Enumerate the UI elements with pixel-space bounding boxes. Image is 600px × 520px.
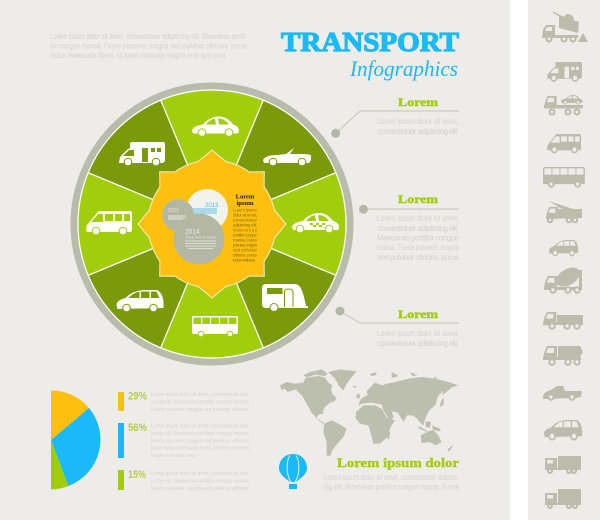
icon: convertible	[263, 148, 311, 166]
circle 2011: 2011	[168, 208, 179, 214]
callout 1: Lorem	[398, 95, 438, 109]
timeline circles	[162, 189, 228, 264]
centre text: posuere, magna	[233, 242, 258, 248]
callout 3: Lorem	[398, 307, 438, 321]
centre text: porttitor congue	[233, 232, 258, 238]
centre text: dolor sit amet,	[233, 212, 257, 218]
callout 2: massa. Fusce posuere, magna	[377, 243, 459, 252]
legend 29%	[118, 390, 250, 413]
icon: box truck	[545, 456, 581, 473]
title: Infographics	[349, 56, 458, 81]
centre text: lectus malesua	[233, 258, 256, 262]
title: TRANSPORT	[281, 27, 459, 57]
callout 3: Lorem ipsum dolor sit amet,	[377, 329, 459, 338]
centre text: sed pulvinar	[233, 248, 258, 252]
centre text: consectetuer	[233, 218, 258, 222]
centre text: massa. Fusce	[233, 238, 258, 242]
world map	[280, 369, 458, 456]
circle 2014	[174, 214, 224, 264]
icon: crane truck	[546, 201, 582, 222]
title	[281, 27, 459, 81]
centre text: Lorem ipsum	[233, 208, 257, 212]
callout 2: Lorem	[398, 192, 438, 206]
legend 56%	[118, 422, 250, 459]
callout 2: sed pulvinar ultricies, purus	[377, 253, 459, 262]
legend 15%	[118, 469, 250, 492]
centre text: ipsum	[237, 200, 254, 207]
legend 56%: iscing elit. Maecenas porttitor congue massa.	[151, 431, 250, 437]
legend 56%: magna eros quis urna.	[151, 453, 196, 459]
icon: flatbed truck	[543, 312, 583, 329]
callout 2: Lorem ipsum dolor sit amet,	[377, 214, 459, 223]
legend 15%: 15%	[128, 469, 146, 481]
icon: van	[547, 134, 581, 153]
icon: station wagon	[544, 420, 582, 440]
wheel chart	[74, 86, 350, 362]
icon: van	[86, 211, 132, 235]
intro text: Lorem ipsum dolor sit amet, consectetuer adipiscing elit. Maecenas portti-	[50, 32, 247, 41]
map caption	[324, 455, 459, 492]
legend 56%: purus lectus malesuada libero, sit amet commodo	[151, 446, 250, 452]
wedges	[78, 90, 346, 358]
legend 29%: 29%	[128, 390, 147, 402]
centre text: Lorem	[236, 194, 255, 200]
centre text: adipiscing elit.	[233, 222, 257, 228]
callout 2: consectetuer adipiscing elit.	[377, 224, 459, 233]
map caption: Lorem ipsum dolor sit amet, consectetuer adipisc-	[324, 473, 459, 482]
legend 15%: Lorem ipsum dolor sit amet, consectetuer adip-	[151, 471, 250, 477]
map caption: Lorem ipsum dolor	[337, 455, 459, 470]
legend 29%: Lorem ipsum dolor sit amet, consectetuer adip-	[151, 392, 250, 398]
legend 56%: Lorem ipsum dolor sit amet, consectetuer adip-	[151, 424, 250, 430]
legend 56%: 56%	[128, 422, 147, 434]
icon: pickup	[543, 386, 582, 400]
callout 1: consectetuer adipiscing elit.	[377, 127, 459, 136]
centre text: ultricies, purus	[233, 252, 258, 258]
icon: tow truck	[544, 95, 583, 114]
icon: minivan	[116, 290, 164, 312]
centre text: Maecenas	[233, 228, 258, 232]
callout 1	[331, 95, 459, 138]
map caption: ing elit. Maecenas porttitor congue massa. Fusce	[324, 482, 459, 492]
icon: concrete mixer	[544, 264, 583, 293]
icon: hot air balloon	[279, 454, 307, 489]
icon: caravan	[262, 284, 308, 312]
circle 2013: 2013	[205, 203, 219, 209]
icon: tipper truck	[543, 346, 583, 365]
icon: motorhome	[547, 62, 582, 81]
sun centre	[138, 150, 286, 298]
circle 2014: TITLE PLACE HERE	[185, 236, 216, 240]
icon: dump truck	[542, 12, 588, 42]
callout 2	[359, 192, 460, 262]
pie chart	[51, 390, 100, 490]
intro text: tor congue massa. Fusce posuere, magna sed pulvinar ultricies, purus	[50, 42, 247, 50]
callout 1: Lorem ipsum dolor sit amet,	[377, 117, 459, 126]
callout 3: consectetuer adipiscing elit.	[377, 339, 459, 348]
intro text	[50, 32, 247, 60]
callout 2: Maecenas porttitor congue	[377, 234, 460, 242]
icon: cargo truck	[545, 489, 581, 508]
legend 15%: Fusce posuere, magna sed pulvinar ultricies.	[151, 486, 250, 492]
icon: taxi	[292, 213, 339, 233]
centre text	[233, 194, 258, 262]
callout 3	[336, 306, 459, 348]
sidebar: vehicle icons	[542, 12, 588, 508]
intro text: lectus malesuada libero, sit amet commodo magna eros quis urna.	[50, 51, 227, 60]
icon: bus	[543, 167, 585, 187]
legend 56%: Fusce posuere, magna sed pulvinar ultricies,	[151, 438, 250, 444]
icon: car	[192, 116, 239, 136]
icon: bus	[192, 316, 238, 337]
legend 29%: iscing elit. Maecenas porttitor congue massa.	[151, 400, 250, 406]
legend 29%: Fusce posuere, magna sed pulvinar ultricies.	[151, 407, 250, 413]
white strip	[510, 0, 528, 520]
icon: small minivan	[549, 240, 578, 256]
icon: motorhome	[119, 142, 165, 166]
circle 2014: 2014	[185, 228, 200, 236]
legend 15%: iscing elit. Maecenas porttitor congue massa.	[151, 478, 250, 484]
